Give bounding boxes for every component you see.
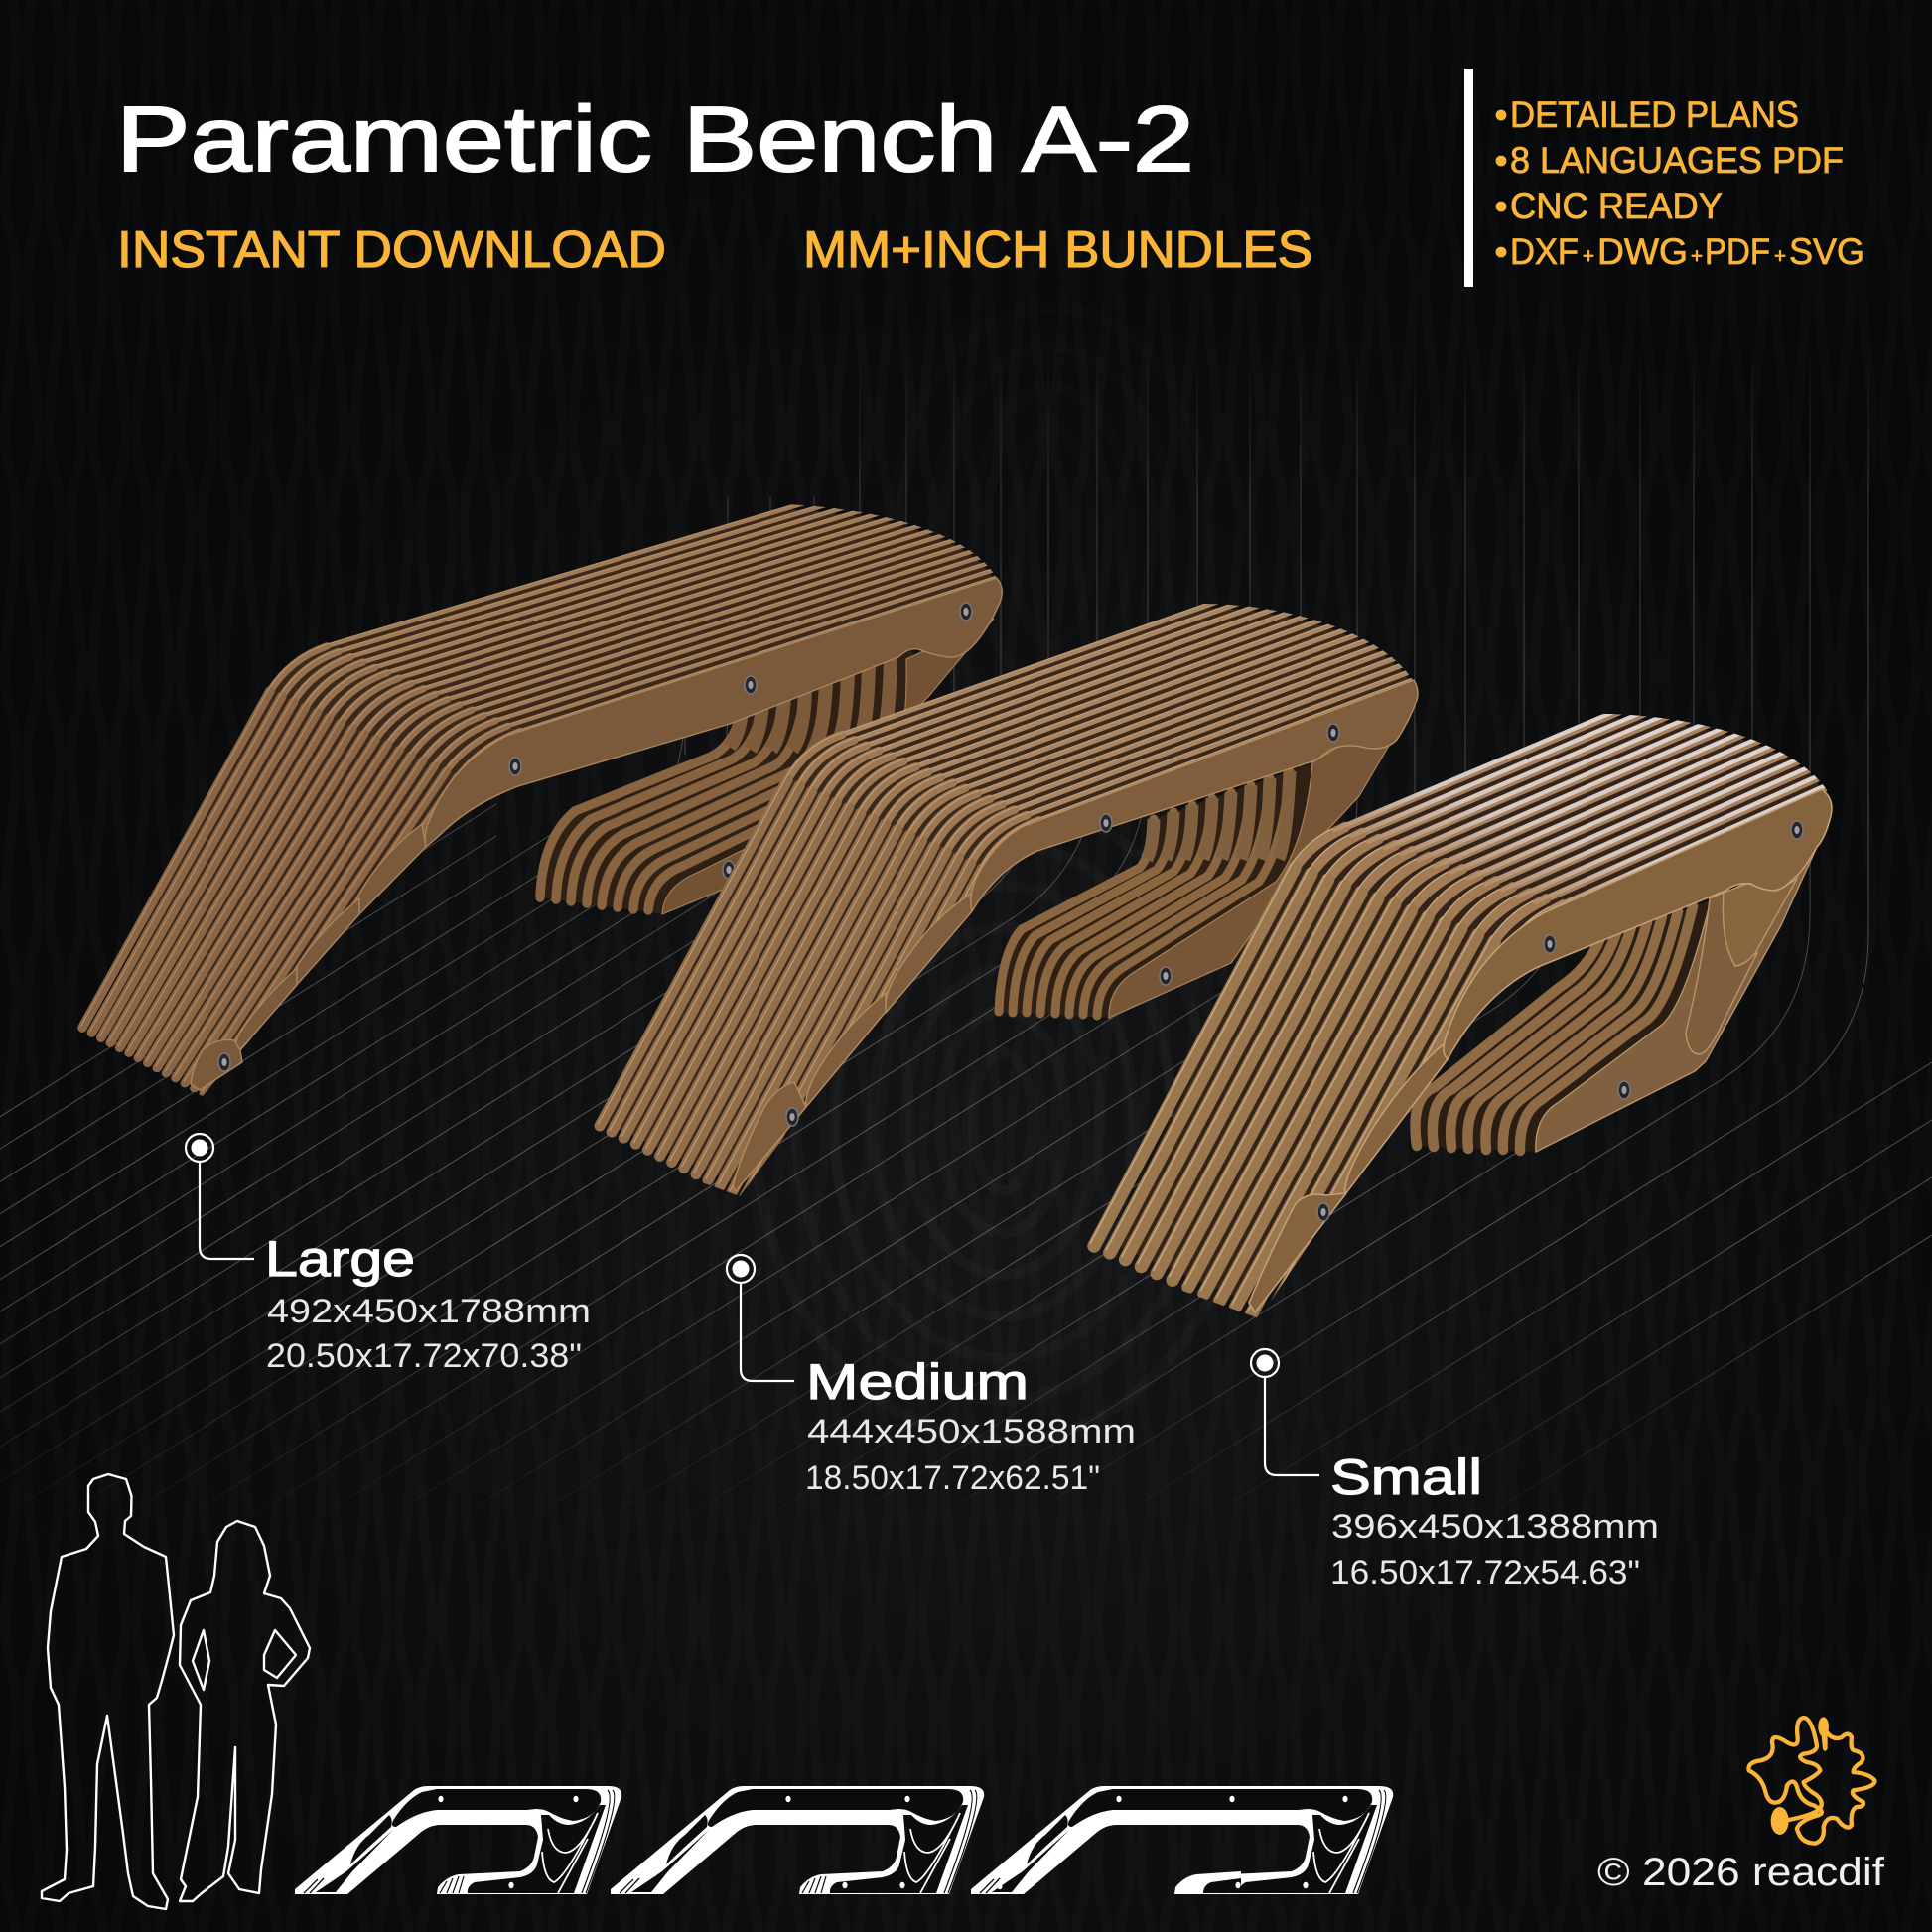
icon: bench profile large: [971, 1786, 1393, 1894]
icon: man silhouette: [42, 1474, 174, 1909]
label: large mm size: 492x450x1788mm: [267, 1293, 591, 1330]
icon: brand logo: [1748, 1717, 1874, 1844]
feature list: +: [1583, 245, 1594, 268]
copyright: © 2026 reacdif: [1597, 1851, 1885, 1894]
label: small inch size: 16.50x17.72x54.63": [1330, 1554, 1640, 1591]
subtitle: instant download: INSTANT DOWNLOAD: [117, 221, 666, 279]
feature list: +: [1774, 245, 1786, 268]
medium bench slats: [594, 604, 1413, 1196]
label: medium mm size: 444x450x1588mm: [807, 1413, 1136, 1450]
large bench front plates: [191, 578, 1002, 1090]
feature list: CNC READY: [1510, 186, 1723, 226]
icon: bench profile small: [295, 1786, 621, 1894]
pin and leader: large: [186, 1134, 254, 1259]
callout: medium: [727, 1255, 1136, 1497]
label: medium name: Medium: [806, 1354, 1029, 1410]
label: small mm size: 396x450x1388mm: [1331, 1508, 1659, 1546]
feature list: DWG: [1597, 231, 1688, 272]
medium bench bolts: [786, 724, 1339, 1126]
large bench: [77, 504, 1003, 1096]
icon: woman silhouette: [180, 1521, 310, 1901]
large bench far leg: [540, 619, 994, 914]
label: large name: Large: [265, 1231, 415, 1287]
vertical divider bar: [1464, 69, 1473, 287]
label: small name: Small: [1330, 1449, 1482, 1505]
feature list: DETAILED PLANS: [1510, 94, 1799, 135]
label: large inch size: 20.50x17.72x70.38": [266, 1337, 582, 1375]
title: Parametric Bench A-2: [116, 87, 1194, 191]
small bench far leg: [1415, 847, 1817, 1152]
small bench slats: [1087, 714, 1827, 1318]
small bench bolts: [1317, 821, 1803, 1221]
callout: large: [186, 1134, 591, 1375]
pin and leader: medium: [727, 1255, 794, 1381]
floor and wall grid lines: [0, 338, 1932, 1588]
medium bench front plates: [733, 680, 1418, 1191]
feature list: PDF: [1705, 231, 1770, 272]
icon: bench profile medium: [611, 1786, 984, 1894]
label: medium inch size: 18.50x17.72x62.51": [805, 1459, 1100, 1497]
feature list: 8 LANGUAGES PDF: [1510, 140, 1844, 181]
feature list: [1496, 94, 1864, 272]
subtitle: bundles: MM+INCH BUNDLES: [803, 221, 1312, 279]
pin and leader: small: [1251, 1349, 1319, 1475]
large bench bolts: [218, 603, 972, 1071]
medium bench far leg: [999, 698, 1417, 1018]
callout: small: [1251, 1349, 1659, 1591]
small bench: [1087, 714, 1833, 1318]
feature list: SVG: [1789, 231, 1864, 272]
medium bench: [594, 604, 1419, 1196]
small bench front plates: [1249, 789, 1832, 1312]
large bench slats: [77, 504, 997, 1096]
feature list: +: [1691, 245, 1703, 268]
feature list: DXF: [1510, 231, 1579, 272]
